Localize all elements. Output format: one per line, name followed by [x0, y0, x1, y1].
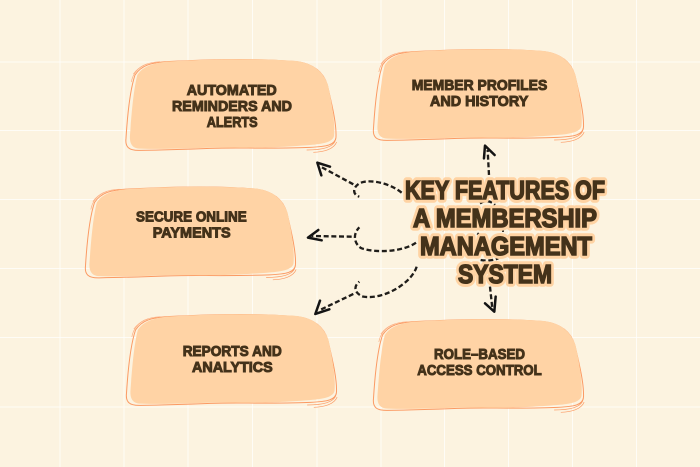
label: secure online payments [136, 210, 247, 242]
label: reports and analytics: REPORTS AND [183, 344, 282, 360]
panel: member profiles and history [373, 49, 584, 142]
title: A MEMBERSHIP [413, 203, 597, 233]
arrow: to role-based access control [477, 201, 504, 312]
label: secure online payments: SECURE ONLINE [136, 210, 247, 226]
label: automated reminders and alerts: REMINDERS AND [172, 99, 292, 115]
arrow: to reports and analytics [315, 267, 417, 314]
title [405, 175, 605, 289]
title: SYSTEM [458, 259, 552, 289]
label: automated reminders and alerts [172, 83, 292, 131]
arrow: to member profiles [484, 146, 495, 175]
title: KEY FEATURES OF [405, 175, 605, 205]
title: KEY FEATURES OF [405, 175, 605, 205]
panel: role-based access control [373, 319, 584, 412]
panel: automated reminders and alerts [126, 59, 337, 152]
panel: secure online payments [85, 187, 296, 280]
label: automated reminders and alerts: ALERTS [207, 115, 258, 131]
label: secure online payments: PAYMENTS [153, 226, 231, 242]
title: MANAGEMENT [420, 231, 592, 261]
label: reports and analytics: ANALYTICS [192, 360, 273, 376]
arrow: to automated reminders [317, 163, 402, 197]
title: A MEMBERSHIP [413, 203, 597, 233]
label: member profiles and history [412, 78, 548, 110]
panel: reports and analytics [126, 314, 337, 407]
label: member profiles and history: AND HISTORY [430, 94, 529, 110]
label: automated reminders and alerts: AUTOMATED [187, 83, 277, 99]
label: role-based access control: ROLE–BASED [434, 347, 525, 363]
label: member profiles and history: MEMBER PROFILES [412, 78, 548, 94]
label: role-based access control: ACCESS CONTROL [417, 363, 542, 379]
label: reports and analytics [183, 344, 282, 376]
arrow: to secure online payments [308, 227, 416, 251]
title: SYSTEM [458, 259, 552, 289]
label: role-based access control [417, 347, 542, 379]
title: MANAGEMENT [420, 231, 592, 261]
